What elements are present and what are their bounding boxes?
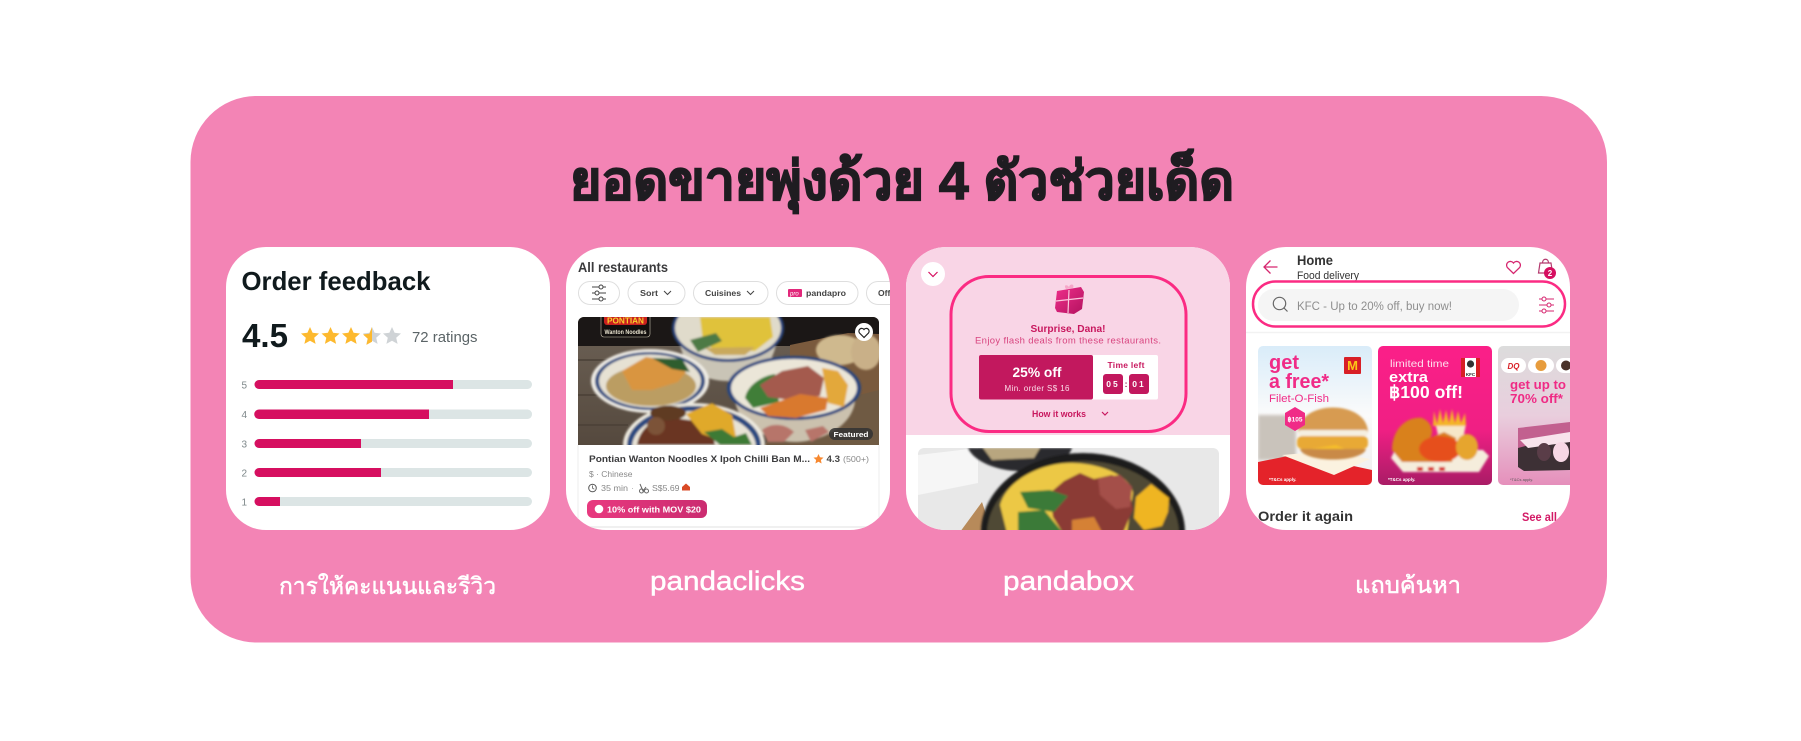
restaurant logo: PONTIAN (607, 316, 644, 326)
deal coupon: 25% off (1012, 364, 1062, 380)
filter chips: pro (789, 292, 799, 298)
right bowl (735, 402, 855, 442)
filter chips: Off (878, 288, 890, 298)
restaurant listing details: $ · Chinese (589, 469, 633, 479)
restaurant listing details: 35 min (601, 483, 628, 493)
bottom plate (622, 402, 766, 445)
banner: McDonald's: a free* (1269, 371, 1329, 393)
banner: pandapro: *T&Cs apply. (1510, 477, 1533, 482)
heading: order feedback: Order feedback (242, 266, 431, 296)
highlight ring: search bar (1253, 282, 1565, 326)
restaurant logo (600, 317, 650, 338)
top bowl (680, 345, 776, 381)
filter chips: Cuisines (705, 288, 741, 298)
pandabox message (975, 324, 1161, 346)
header text (1298, 256, 1359, 280)
banner: KFC: *T&Cs apply. (1388, 477, 1415, 482)
promo tag: 10% off with MOV $20 (607, 504, 701, 514)
banner: McDonald's: Filet-O-Fish (1269, 393, 1329, 405)
banner: pandapro (1498, 346, 1612, 485)
badge: featured: Featured (834, 432, 868, 439)
caption: pandabox: pandabox (1003, 566, 1135, 596)
banner: KFC: KFC (1466, 372, 1476, 377)
section heading: order it again: Order it again (1258, 509, 1353, 524)
panel: pandaclicks card (566, 247, 890, 530)
restaurant logo: Wanton Noodles (604, 330, 647, 336)
pandabox message: Enjoy flash deals from these restaurants. (975, 336, 1161, 346)
caption: search bar: แถบค้นหา (1355, 572, 1461, 598)
noodle bundles (816, 335, 864, 365)
banner: McDonald's: *T&Cs apply. (1269, 477, 1296, 482)
banner: KFC: ฿100 off! (1389, 382, 1463, 402)
bar chart: rating distribution: 4 (242, 410, 248, 421)
deal coupon: : (1125, 379, 1128, 389)
banner: McDonald's: M (1347, 358, 1358, 373)
heading: all restaurants: All restaurants (578, 260, 668, 275)
icon: heart (1507, 261, 1520, 274)
icon: back arrow (1264, 260, 1278, 274)
deal coupon: Time left (1108, 360, 1145, 370)
photo: noodle bowls (578, 317, 879, 445)
highlight ring: pandabox (951, 276, 1186, 432)
back bowl (968, 448, 1072, 471)
banner: McDonald's (1258, 346, 1372, 485)
rating value: 4.5 (242, 317, 288, 354)
bar chart: rating distribution: 5 (242, 380, 248, 392)
infographic canvas (190, 96, 1607, 642)
banner: KFC: limited time (1390, 358, 1449, 370)
filter chips: pandapro (806, 288, 846, 298)
restaurant listing details: 4.3 (826, 454, 840, 464)
bar chart: rating distribution (242, 380, 532, 508)
filter chips: Sort (640, 288, 658, 298)
caption: ratings and reviews: การให้คะแนนและรีวิว (279, 573, 496, 599)
icon: shopping bag with badge: 2 (1548, 269, 1553, 278)
banner: pandapro: 70% off* (1510, 392, 1563, 406)
restaurant listing details: Pontian Wanton Noodles X Ipoh Chilli Ban M... (589, 454, 810, 465)
panel: pandabox card (906, 247, 1230, 530)
header text: Home (1297, 252, 1333, 268)
restaurant listing details: S$5.69 (652, 483, 680, 493)
search field (1258, 289, 1519, 321)
header text: Food delivery (1297, 270, 1359, 282)
banner: pandapro: DQ (1508, 362, 1520, 371)
deal coupon: 05 (1106, 379, 1120, 389)
how it works link: How it works (1032, 409, 1086, 419)
icon: shopping bag with badge (1538, 259, 1556, 279)
panel: search bar card (1246, 247, 1570, 530)
restaurant listing details: (500+) (843, 454, 869, 464)
left plate (591, 349, 709, 413)
search field: KFC - Up to 20% off, buy now! (1297, 301, 1452, 313)
badge: featured (829, 428, 873, 440)
panel: order feedback card (226, 247, 550, 530)
icon: collapse chevron (921, 262, 945, 286)
icon: favourite heart (855, 323, 873, 341)
ratings count: 72 ratings (412, 329, 478, 346)
photo: bbq pork noodles (918, 448, 1219, 530)
pandabox message: Surprise, Dana! (1030, 324, 1106, 335)
restaurant listing details: · (631, 483, 634, 493)
banner: McDonald's: ฿105 (1288, 416, 1303, 424)
banner: KFC: extra (1389, 370, 1429, 386)
icon: gift box (1055, 284, 1084, 314)
link: see all: See all (1522, 510, 1557, 524)
icon: rating stars (301, 327, 401, 345)
icon: filter sliders (1539, 297, 1554, 313)
bar chart: rating distribution: 1 (242, 498, 248, 508)
how it works link (1032, 410, 1108, 417)
promo tag (587, 500, 707, 518)
deal coupon (979, 355, 1158, 400)
banner: KFC (1378, 346, 1492, 485)
title: ยอดขายพุ่งด้วย 4 ตัวช่วยเด็ด (570, 149, 1234, 214)
banner: pandapro: get up to (1510, 378, 1566, 392)
deal coupon: Min. order S$ 16 (1004, 384, 1070, 393)
deal coupon: 01 (1132, 379, 1146, 389)
restaurant listing details (578, 445, 879, 530)
panel: pink background (190, 96, 1607, 642)
bar chart: rating distribution: 3 (242, 440, 248, 450)
bar chart: rating distribution: 2 (242, 468, 248, 480)
filter chips (578, 282, 926, 304)
front bowl (980, 451, 1187, 530)
caption: pandaclicks: pandaclicks (650, 566, 805, 596)
banner: McDonald's: get (1269, 352, 1299, 374)
